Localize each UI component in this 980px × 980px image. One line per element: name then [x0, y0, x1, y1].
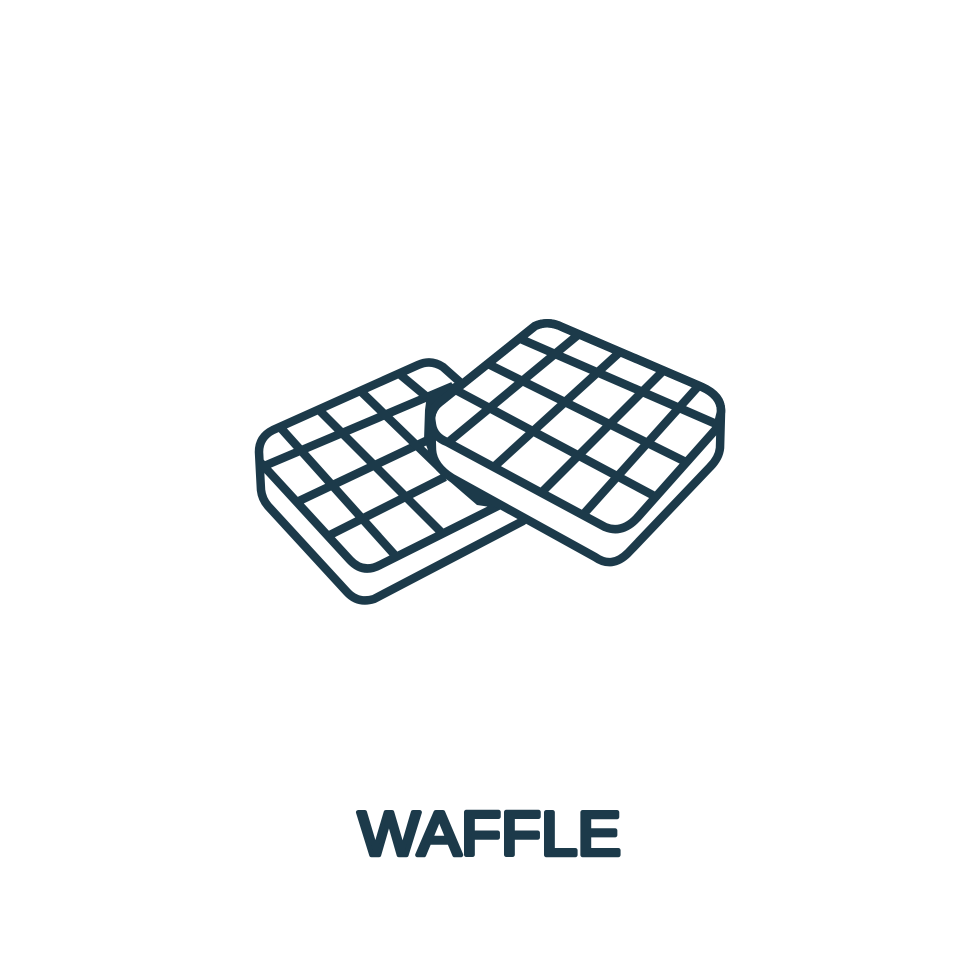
infographic canvas: [254, 319, 726, 858]
icon: right waffle: [431, 323, 730, 562]
icon: left waffle: [250, 362, 523, 600]
title: WAFFLE: [358, 800, 621, 869]
